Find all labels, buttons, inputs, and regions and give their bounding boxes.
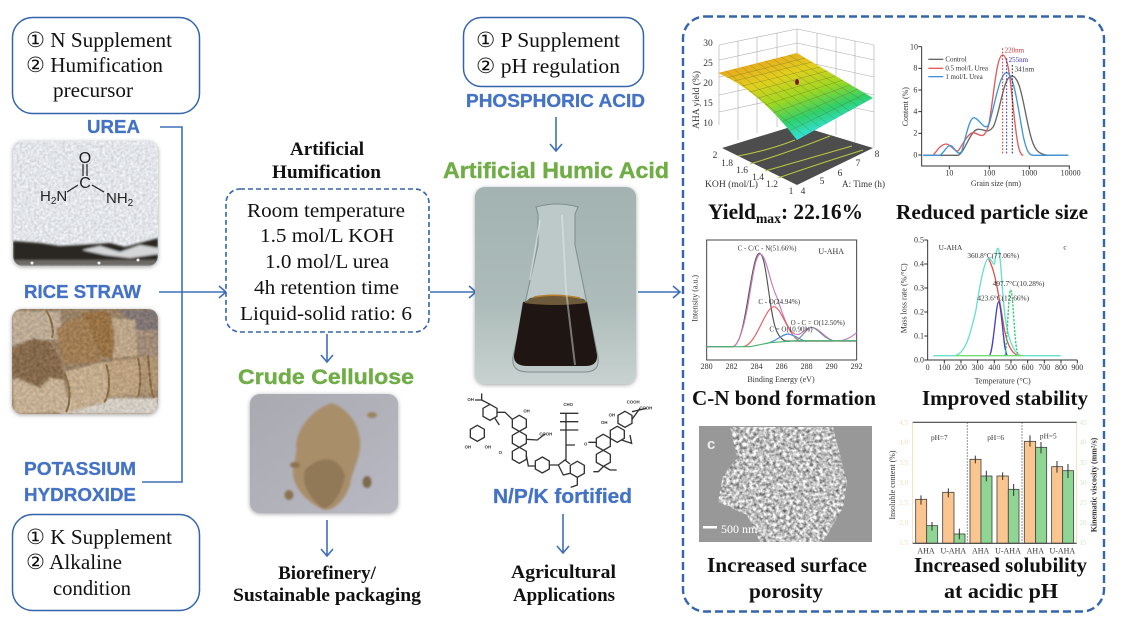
chart: AHA yield response surface: KOH (mol/L) bbox=[705, 179, 758, 190]
heading: NPK fortified: N/P/K fortified bbox=[493, 486, 632, 508]
chart: XPS C1s spectrum: Intensity (a.u.) bbox=[690, 275, 699, 322]
chart: insoluble content and kinematic viscosity bars: pH=5 bbox=[1040, 431, 1057, 440]
chart: AHA yield response surface: 2 bbox=[713, 151, 718, 161]
chart: insoluble content and kinematic viscosity bars: 45 bbox=[1079, 418, 1087, 427]
chart: thermogravimetric mass loss rate: 900 bbox=[1071, 363, 1083, 372]
chart: insoluble content and kinematic viscosity bars: AHA bbox=[1027, 546, 1044, 555]
text: agricultural applications bbox=[511, 562, 616, 606]
caption: increased solubility at acidic pH: Increased solubility bbox=[914, 553, 1087, 577]
panel: K supplement callout: ② Alkaline bbox=[26, 550, 122, 574]
chart: insoluble content and kinematic viscosity bars: 2.5 bbox=[899, 498, 908, 507]
chart: thermogravimetric mass loss rate: c bbox=[1063, 242, 1067, 251]
chart: thermogravimetric mass loss rate: 800 bbox=[1055, 363, 1067, 372]
caption: increased surface porosity: Increased surface bbox=[707, 553, 867, 577]
panel: N supplement callout: precursor bbox=[53, 78, 133, 102]
chart: XPS C1s spectrum: 290 bbox=[826, 362, 838, 371]
chart: insoluble content and kinematic viscosity bars: U-AHA bbox=[940, 546, 966, 555]
diagram: humic acid molecular structure: O bbox=[584, 441, 588, 446]
chart: XPS C1s spectrum: 284 bbox=[751, 362, 763, 371]
caption: yield max: max bbox=[756, 212, 781, 227]
panel: N supplement callout: ① N Supplement bbox=[26, 28, 172, 52]
chart: insoluble content and kinematic viscosity bars: 40 bbox=[1079, 437, 1087, 446]
chart: grain size distribution: 255nm bbox=[1009, 56, 1029, 64]
heading: artificial humification bbox=[272, 139, 381, 183]
photo: urea granules with structure: C bbox=[79, 175, 91, 192]
chart: AHA yield response surface: A: Time (h) bbox=[842, 179, 885, 190]
chart: insoluble content and kinematic viscosity bars: 15 bbox=[1079, 538, 1087, 547]
panel: reaction conditions: Room temperature bbox=[247, 200, 405, 222]
photo: flask of humic acid bbox=[475, 187, 636, 384]
caption: C-N bond formation: C-N bond formation bbox=[692, 386, 876, 410]
text: biorefinery application: Sustainable packaging bbox=[233, 585, 422, 606]
chart: thermogravimetric mass loss rate bbox=[900, 236, 1083, 385]
chart: insoluble content and kinematic viscosity bars: 25 bbox=[1079, 498, 1087, 507]
chart: AHA yield response surface: 4 bbox=[801, 187, 806, 197]
photo: urea granules with structure: 2 bbox=[128, 198, 134, 209]
chart: thermogravimetric mass loss rate: 600 bbox=[1022, 363, 1034, 372]
heading: potassium hydroxide: POTASSIUM bbox=[24, 459, 136, 479]
chart: thermogravimetric mass loss rate: 100 bbox=[938, 363, 950, 372]
chart: thermogravimetric mass loss rate: 500 bbox=[1005, 363, 1017, 372]
diagram: humic acid molecular structure: OH bbox=[467, 397, 474, 402]
chart: thermogravimetric mass loss rate: 0.4 bbox=[914, 260, 924, 269]
chart: AHA yield response surface: 20 bbox=[703, 79, 713, 89]
chart: grain size distribution: 10000 bbox=[1061, 169, 1081, 178]
diagram: humic acid molecular structure: COOH bbox=[639, 405, 652, 410]
panel: K supplement callout: condition bbox=[53, 576, 131, 600]
chart: XPS C1s spectrum: 286 bbox=[776, 362, 788, 371]
chart: insoluble content and kinematic viscosity bars: AHA bbox=[972, 546, 990, 555]
chart: AHA yield response surface bbox=[691, 29, 885, 197]
chart: insoluble content and kinematic viscosity bars: 20 bbox=[1079, 518, 1087, 527]
photo: SEM micrograph of surface porosity: 500 nm bbox=[721, 522, 758, 536]
chart: insoluble content and kinematic viscosity bars: 1.5 bbox=[899, 538, 908, 547]
chart: insoluble content and kinematic viscosity bars: 3.5 bbox=[899, 458, 908, 467]
diagram: humic acid molecular structure: O bbox=[499, 450, 503, 455]
chart: insoluble content and kinematic viscosity bars: AHA bbox=[917, 546, 935, 555]
chart: XPS C1s spectrum: 288 bbox=[801, 362, 813, 371]
chart: AHA yield response surface: 8 bbox=[875, 150, 880, 160]
text: agricultural applications: Agricultural bbox=[511, 562, 616, 583]
chart: grain size distribution: Grain size (nm) bbox=[971, 179, 1021, 188]
arrow: to agricultural applications bbox=[557, 514, 569, 553]
panel: properties frame bbox=[683, 16, 1104, 612]
chart: thermogravimetric mass loss rate: Mass loss rate (%/°C) bbox=[900, 263, 909, 333]
chart: AHA yield response surface: 15 bbox=[703, 99, 713, 109]
chart: thermogravimetric mass loss rate: 400 bbox=[988, 363, 1000, 372]
panel: P supplement callout bbox=[464, 18, 644, 86]
heading: artificial humification: Humification bbox=[272, 162, 381, 183]
chart: XPS C1s spectrum: 282 bbox=[726, 362, 738, 371]
chart: XPS C1s spectrum: C - C/C - N(51.66%) bbox=[738, 245, 797, 253]
heading: potassium hydroxide: HYDROXIDE bbox=[24, 485, 136, 505]
chart: thermogravimetric mass loss rate: 360.8°C(77.06%) bbox=[967, 251, 1020, 260]
chart: XPS C1s spectrum: 292 bbox=[851, 362, 863, 371]
arrow: phosphoric acid down bbox=[550, 117, 562, 151]
panel: P supplement callout: ① P Supplement bbox=[476, 28, 620, 52]
chart: grain size distribution: 220nm bbox=[1005, 47, 1025, 55]
diagram: humic acid molecular structure: COOH bbox=[539, 431, 552, 436]
chart: XPS C1s spectrum: O - C = O(12.50%) bbox=[791, 319, 846, 327]
chart: insoluble content and kinematic viscosity bars: Insoluble content (%) bbox=[888, 450, 897, 520]
chart: insoluble content and kinematic viscosity bars: pH=7 bbox=[931, 433, 948, 442]
chart: AHA yield response surface: 1.8 bbox=[721, 159, 733, 169]
photo: rice straw bales bbox=[12, 309, 158, 414]
chart: XPS C1s spectrum bbox=[690, 240, 863, 384]
chart: insoluble content and kinematic viscosity bars: 4.5 bbox=[899, 418, 908, 427]
panel: K supplement callout bbox=[12, 514, 200, 610]
chart: thermogravimetric mass loss rate: 0.0 bbox=[914, 356, 924, 365]
caption: yield max: : 22.16% bbox=[781, 199, 863, 224]
photo: SEM micrograph of surface porosity: c bbox=[707, 436, 715, 453]
chart: AHA yield response surface: 30 bbox=[703, 39, 713, 49]
panel: reaction conditions: 4h retention time bbox=[254, 277, 399, 299]
diagram: humic acid molecular structure bbox=[465, 393, 652, 487]
panel: K supplement callout: ① K Supplement bbox=[26, 525, 172, 549]
chart: AHA yield response surface: 1.6 bbox=[736, 166, 748, 176]
photo: crude cellulose powder bbox=[250, 394, 398, 513]
chart: insoluble content and kinematic viscosity bars: 4.0 bbox=[899, 437, 908, 446]
heading: potassium hydroxide bbox=[24, 459, 136, 505]
heading: artificial humification: Artificial bbox=[290, 139, 364, 160]
chart: grain size distribution: Control bbox=[945, 55, 967, 63]
chart: insoluble content and kinematic viscosity bars: 2.0 bbox=[899, 518, 908, 527]
chart: grain size distribution: 4 bbox=[913, 107, 917, 116]
caption: increased solubility at acidic pH bbox=[914, 553, 1087, 603]
chart: AHA yield response surface: 25 bbox=[703, 59, 713, 69]
chart: thermogravimetric mass loss rate: 0.5 bbox=[914, 236, 924, 245]
diagram: humic acid molecular structure: CHO bbox=[563, 402, 574, 407]
heading: rice straw: RICE STRAW bbox=[24, 282, 141, 302]
chart: AHA yield response surface: 5 bbox=[820, 177, 825, 187]
chart: grain size distribution: 8 bbox=[913, 64, 917, 73]
chart: grain size distribution: 0 bbox=[913, 150, 917, 159]
diagram: humic acid molecular structure: OH bbox=[609, 413, 615, 418]
chart: XPS C1s spectrum: C - O(24.94%) bbox=[758, 298, 801, 306]
chart: thermogravimetric mass loss rate: 700 bbox=[1038, 363, 1050, 372]
chart: thermogravimetric mass loss rate: 0.1 bbox=[914, 332, 924, 341]
photo: urea granules with structure: 2 bbox=[51, 196, 57, 207]
heading: crude cellulose: Crude Cellulose bbox=[238, 366, 414, 389]
chart: thermogravimetric mass loss rate: U-AHA bbox=[939, 243, 963, 252]
chart: XPS C1s spectrum: 280 bbox=[701, 362, 713, 371]
chart: grain size distribution: 100 bbox=[983, 169, 995, 178]
chart: insoluble content and kinematic viscosity bars: pH=6 bbox=[987, 433, 1004, 442]
photo: urea granules with structure: O bbox=[79, 150, 91, 167]
chart: grain size distribution: Content (%) bbox=[901, 87, 910, 126]
chart: insoluble content and kinematic viscosity bars: 3.0 bbox=[899, 478, 908, 487]
arrow: to biorefinery bbox=[321, 520, 333, 556]
chart: AHA yield response surface: 10 bbox=[703, 119, 713, 129]
chart: grain size distribution: 10 bbox=[910, 42, 918, 51]
panel: N supplement callout: ② Humification bbox=[26, 53, 163, 77]
chart: thermogravimetric mass loss rate: 0.3 bbox=[914, 284, 924, 293]
diagram: humic acid molecular structure: COOH bbox=[627, 399, 640, 404]
panel: N supplement callout bbox=[12, 18, 200, 114]
chart: grain size distribution: 10 bbox=[945, 169, 953, 178]
chart: insoluble content and kinematic viscosity bars: U-AHA bbox=[1049, 546, 1075, 555]
chart: insoluble content and kinematic viscosity bars: 30 bbox=[1079, 478, 1087, 487]
chart: XPS C1s spectrum: Binding Energy (eV) bbox=[747, 375, 815, 384]
panel: reaction conditions: 1.0 mol/L urea bbox=[265, 251, 389, 273]
panel: reaction conditions: Liquid-solid ratio: 6 bbox=[240, 303, 412, 325]
chart: XPS C1s spectrum: U-AHA bbox=[818, 247, 844, 256]
chart: AHA yield response surface: 7 bbox=[856, 159, 861, 169]
arrow: humification to humic acid bbox=[430, 286, 476, 298]
chart: AHA yield response surface: AHA yield (%) bbox=[691, 71, 702, 129]
heading: phosphoric acid: PHOSPHORIC ACID bbox=[466, 91, 645, 111]
panel: P supplement callout: ② pH regulation bbox=[476, 54, 621, 78]
caption: reduced particle size: Reduced particle size bbox=[896, 200, 1088, 224]
arrow: humic acid to properties bbox=[638, 286, 680, 298]
arrow: to crude cellulose bbox=[321, 334, 333, 362]
chart: insoluble content and kinematic viscosity bars: 35 bbox=[1079, 458, 1087, 467]
diagram: humic acid molecular structure: OH bbox=[523, 409, 530, 414]
chart: grain size distribution: 1000 bbox=[1021, 169, 1037, 178]
chart: grain size distribution: 0.5 mol/L Urea bbox=[945, 65, 988, 73]
photo: SEM micrograph of surface porosity bbox=[699, 426, 872, 542]
chart: grain size distribution: 6 bbox=[913, 85, 917, 94]
panel: reaction conditions: 1.5 mol/L KOH bbox=[260, 225, 394, 247]
chart: insoluble content and kinematic viscosity bars bbox=[888, 418, 1099, 555]
diagram: humic acid molecular structure: OH bbox=[485, 444, 491, 449]
chart: thermogravimetric mass loss rate: 0.2 bbox=[914, 308, 924, 317]
chart: thermogravimetric mass loss rate: 423.6°C(12.66%) bbox=[977, 294, 1030, 303]
caption: increased solubility at acidic pH: at acidic pH bbox=[944, 579, 1058, 603]
chart: AHA yield response surface: 6 bbox=[838, 169, 843, 179]
photo: urea granules with structure: NH bbox=[106, 190, 128, 207]
caption: yield max: Yield bbox=[708, 199, 757, 224]
diagram: humic acid molecular structure: OH bbox=[465, 444, 471, 449]
chart: thermogravimetric mass loss rate: 0 bbox=[926, 363, 930, 372]
chart: AHA yield response surface: 1.4 bbox=[752, 173, 764, 183]
panel: reaction conditions bbox=[226, 189, 429, 332]
chart: XPS C1s spectrum: C = O(10.90%) bbox=[769, 325, 813, 333]
chart: grain size distribution: 2 bbox=[913, 129, 917, 138]
photo: urea granules with structure: N bbox=[56, 188, 67, 205]
caption: increased surface porosity: porosity bbox=[749, 579, 824, 603]
chart: grain size distribution: 341nm bbox=[1015, 66, 1035, 74]
text: biorefinery application: Biorefinery/ bbox=[278, 563, 377, 584]
text: biorefinery application bbox=[233, 563, 422, 606]
chart: AHA yield response surface: 1.2 bbox=[766, 180, 778, 190]
chart: thermogravimetric mass loss rate: Temperature (°C) bbox=[975, 376, 1031, 385]
chart: insoluble content and kinematic viscosity bars: Kinematic viscosity (mm²/s) bbox=[1090, 437, 1099, 532]
chart: insoluble content and kinematic viscosity bars: U-AHA bbox=[995, 546, 1021, 555]
chart: grain size distribution: 1 mol/L Urea bbox=[945, 73, 983, 81]
heading: urea: UREA bbox=[87, 117, 140, 137]
chart: grain size distribution bbox=[901, 42, 1081, 188]
chart: thermogravimetric mass loss rate: 300 bbox=[972, 363, 984, 372]
arrow: inputs bracket to artificial humification bbox=[142, 127, 226, 482]
photo: urea granules with structure: H bbox=[40, 188, 51, 205]
text: agricultural applications: Applications bbox=[513, 585, 615, 606]
chart: thermogravimetric mass loss rate: 497.7°C(10.28%) bbox=[993, 279, 1045, 288]
heading: artificial humic acid: Artificial Humic Acid bbox=[443, 158, 669, 183]
chart: thermogravimetric mass loss rate: 200 bbox=[955, 363, 967, 372]
caption: increased surface porosity bbox=[707, 553, 867, 603]
photo: urea granules with structure bbox=[13, 141, 158, 266]
chart: AHA yield response surface: 1 bbox=[789, 187, 794, 197]
diagram: humic acid molecular structure: OH bbox=[601, 420, 607, 425]
caption: improved stability: Improved stability bbox=[922, 386, 1088, 410]
